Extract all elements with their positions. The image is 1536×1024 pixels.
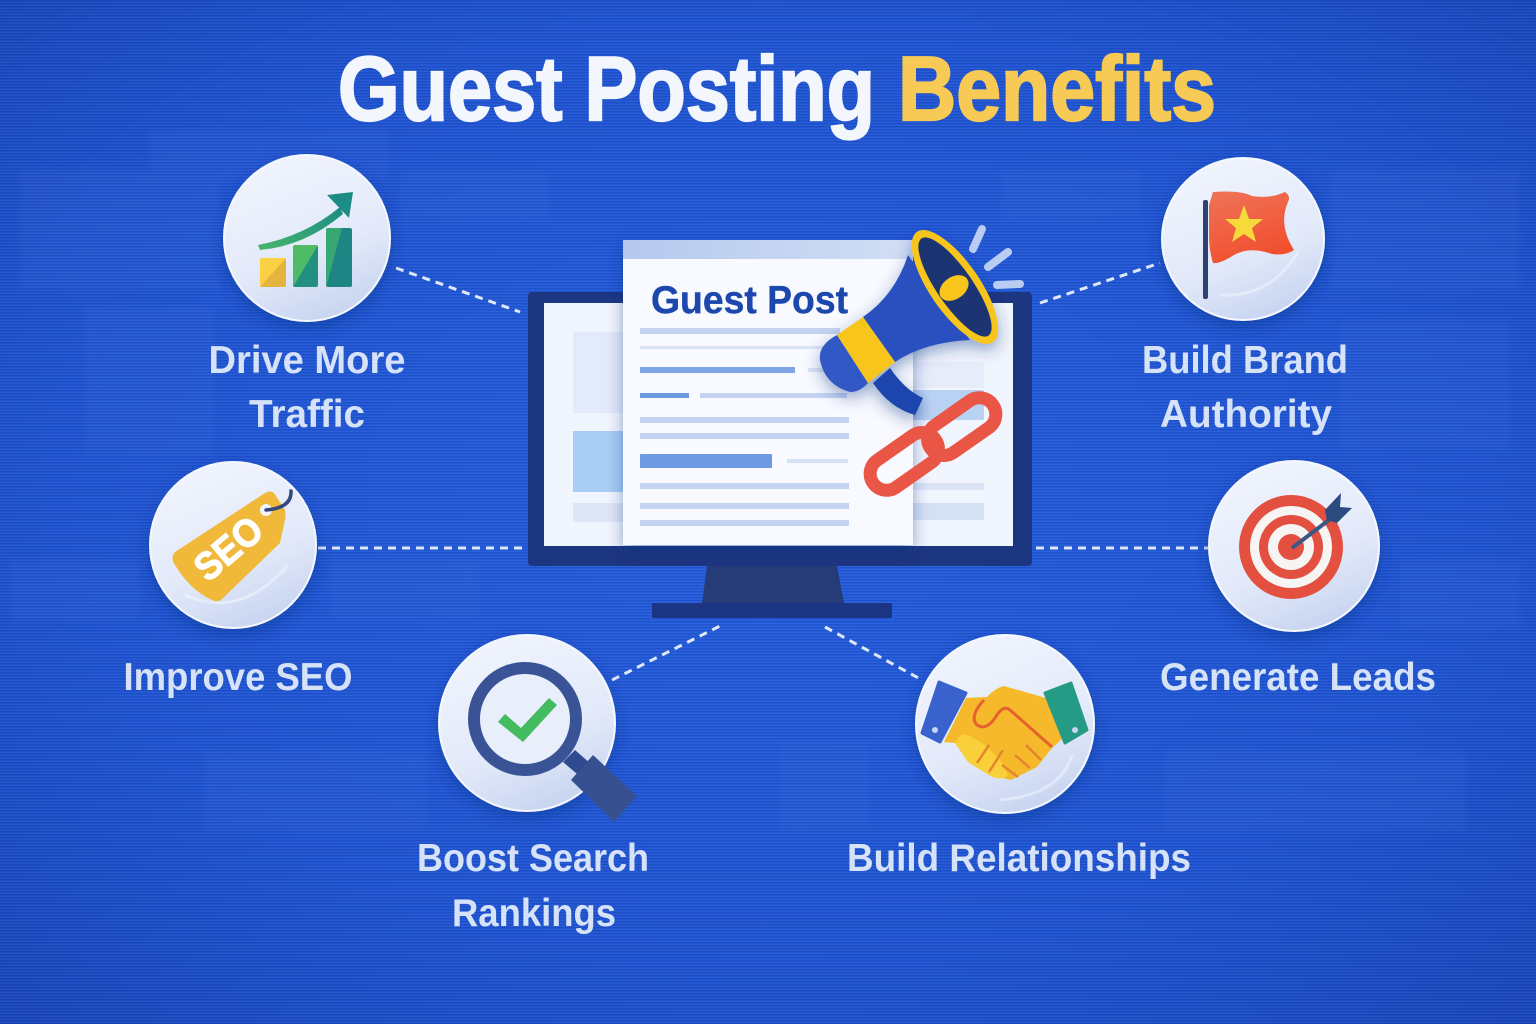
icon: chain link — [864, 391, 1002, 497]
benefit: build brand authority — [1142, 158, 1348, 436]
icon: seo tag — [150, 462, 316, 628]
label: Build Relationships — [847, 837, 1191, 880]
label: Generate Leads — [1160, 656, 1436, 699]
document lines — [640, 328, 849, 526]
benefit: boost search rankings: Rankings — [452, 892, 616, 935]
label: Build Brand — [1142, 339, 1348, 382]
benefit: drive more traffic: Traffic — [249, 393, 365, 436]
label: Improve SEO — [124, 656, 352, 699]
benefit: build brand authority: Authority — [1160, 393, 1332, 436]
icon: sound rays — [973, 229, 1020, 285]
document heading: Guest Post — [651, 279, 848, 322]
label: Boost Search — [417, 837, 649, 880]
benefit: drive more traffic — [208, 155, 406, 436]
title: Benefits — [898, 39, 1216, 140]
back cap — [820, 335, 868, 392]
yellow band — [837, 317, 895, 383]
icon: megaphone — [820, 218, 1014, 415]
horn — [863, 255, 970, 362]
icon: seo tag: SEO — [186, 508, 272, 590]
monitor stand — [652, 566, 892, 618]
benefit: build relationships — [847, 635, 1191, 880]
guest post document — [623, 240, 913, 545]
label: Drive More — [208, 339, 406, 382]
benefit: boost search rankings — [417, 635, 649, 935]
icon: handshake — [916, 635, 1094, 813]
icon: growth chart — [224, 155, 390, 321]
benefit: improve seo — [124, 462, 352, 699]
title: Guest Posting — [338, 39, 875, 140]
central monitor illustration — [528, 218, 1032, 618]
connector lines — [318, 263, 1208, 680]
benefit: generate leads — [1160, 461, 1436, 699]
icon: flag — [1162, 158, 1324, 320]
icon: magnifier — [439, 635, 637, 822]
rim — [896, 218, 1014, 356]
icon: target — [1209, 461, 1379, 631]
handle — [873, 368, 923, 415]
monitor frame — [528, 292, 1032, 566]
